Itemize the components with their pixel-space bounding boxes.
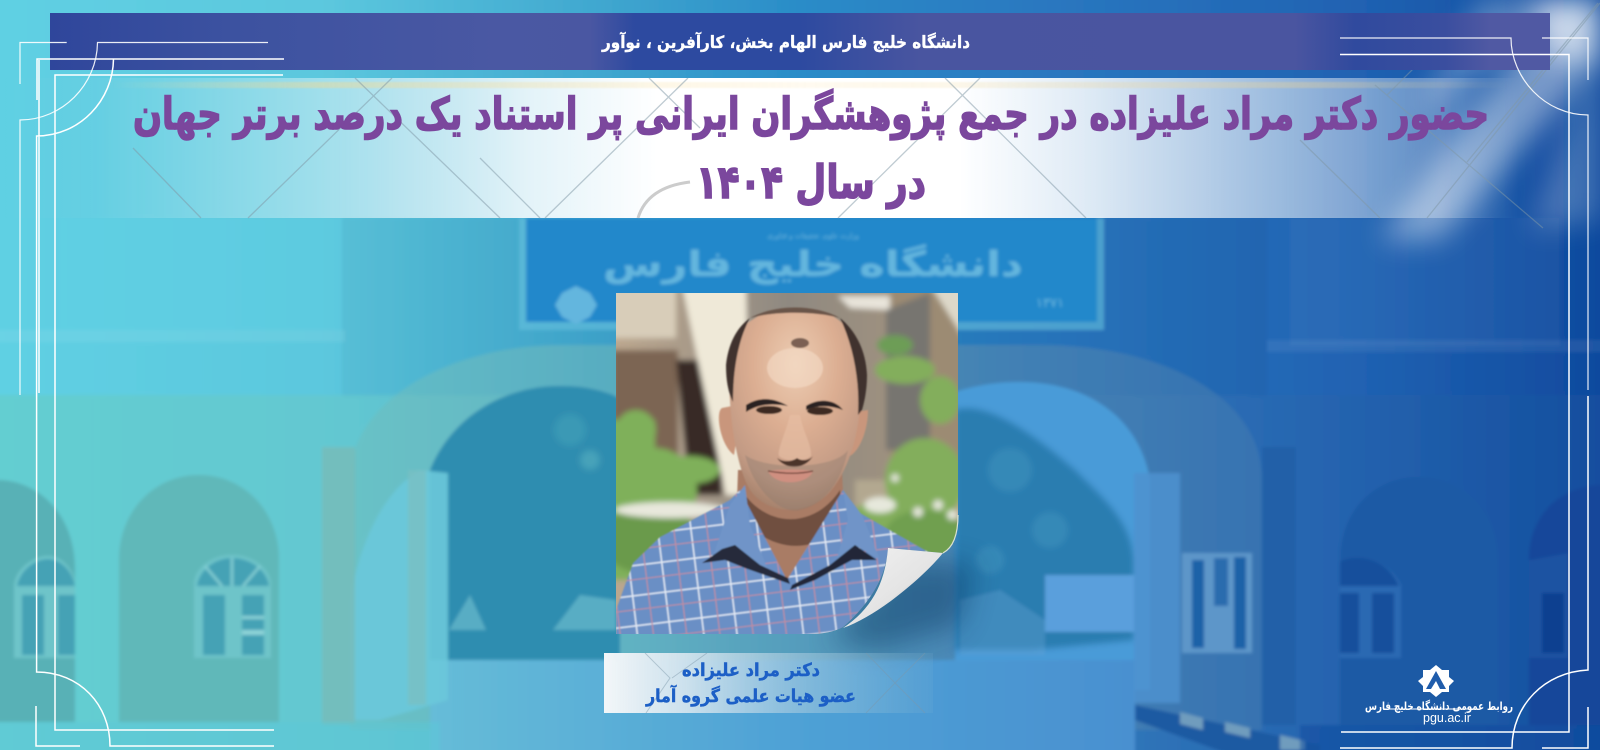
left arches [119, 475, 279, 722]
banner slogan: دانشگاه خلیج فارس الهام بخش، کارآفرین ، نوآور [601, 31, 970, 53]
head [729, 308, 862, 510]
portrait [616, 306, 929, 634]
caption name: دکتر مراد علیزاده [682, 660, 820, 681]
university sign: دانشگاه خلیج فارس [603, 244, 1023, 285]
top hair [750, 308, 840, 318]
curb stones [1135, 705, 1320, 750]
shrubs in left arch [449, 595, 616, 630]
neck [736, 470, 845, 582]
far right window [1529, 553, 1568, 658]
forehead highlight [767, 348, 823, 388]
white wall through right arch [1045, 575, 1135, 632]
central tower [342, 218, 1267, 398]
website: pgu.ac.ir [1423, 711, 1471, 725]
upper left block [60, 218, 342, 330]
trees [554, 408, 1134, 650]
photo background [600, 285, 965, 640]
university public relations logo [1365, 665, 1513, 725]
university sign [519, 218, 1104, 330]
stubble [745, 450, 848, 511]
left flowers [615, 502, 725, 518]
page curl [843, 548, 943, 628]
photo shadow [830, 560, 975, 650]
left arch window [194, 555, 271, 658]
left bush [600, 410, 720, 580]
side hair [726, 318, 867, 415]
bottom left ground [0, 722, 440, 750]
ears [719, 406, 738, 455]
right pillars [1134, 473, 1180, 703]
caption [604, 653, 933, 713]
right wing roof [1267, 340, 1600, 352]
right arches [1340, 477, 1498, 725]
gate ground [430, 660, 1135, 750]
emblem [1418, 665, 1454, 697]
right bush [856, 332, 958, 553]
sky rays at top right [1380, 0, 1600, 240]
upper right block [1290, 218, 1560, 346]
big gate arch [350, 345, 1262, 730]
left wing roof [0, 330, 345, 342]
curl edge highlight [943, 515, 958, 553]
photo: Dr. Alizadeh [600, 285, 965, 640]
title [133, 88, 1489, 209]
organisation name: روابط عمومی دانشگاه خلیج فارس [1365, 699, 1513, 714]
university sign: وزارت علوم، تحقیقات و فناوری [767, 232, 859, 240]
eyebrows [746, 399, 788, 412]
forelock [791, 338, 809, 348]
left pillars [350, 470, 448, 720]
lower wall [0, 395, 1600, 750]
eyes [756, 406, 782, 414]
shirt [616, 490, 929, 634]
title: در سال ۱۴۰۴ [696, 155, 926, 209]
nose [779, 415, 811, 460]
right arch window [1340, 558, 1401, 658]
right arch opening [955, 382, 1150, 690]
caption role: عضو هیات علمی گروه آمار [645, 684, 856, 707]
far left window [14, 556, 75, 658]
collar shadow [702, 545, 790, 584]
university sign: ۱۳۷۱ [1036, 296, 1064, 311]
collar flaps [718, 484, 878, 568]
shrubs in right arch [960, 590, 1045, 655]
bottom right ground [1300, 725, 1600, 750]
left arch opening [430, 386, 620, 690]
top banner [50, 13, 1550, 70]
mouth [768, 470, 813, 482]
title band [0, 3, 1600, 228]
right flowers [864, 474, 957, 520]
